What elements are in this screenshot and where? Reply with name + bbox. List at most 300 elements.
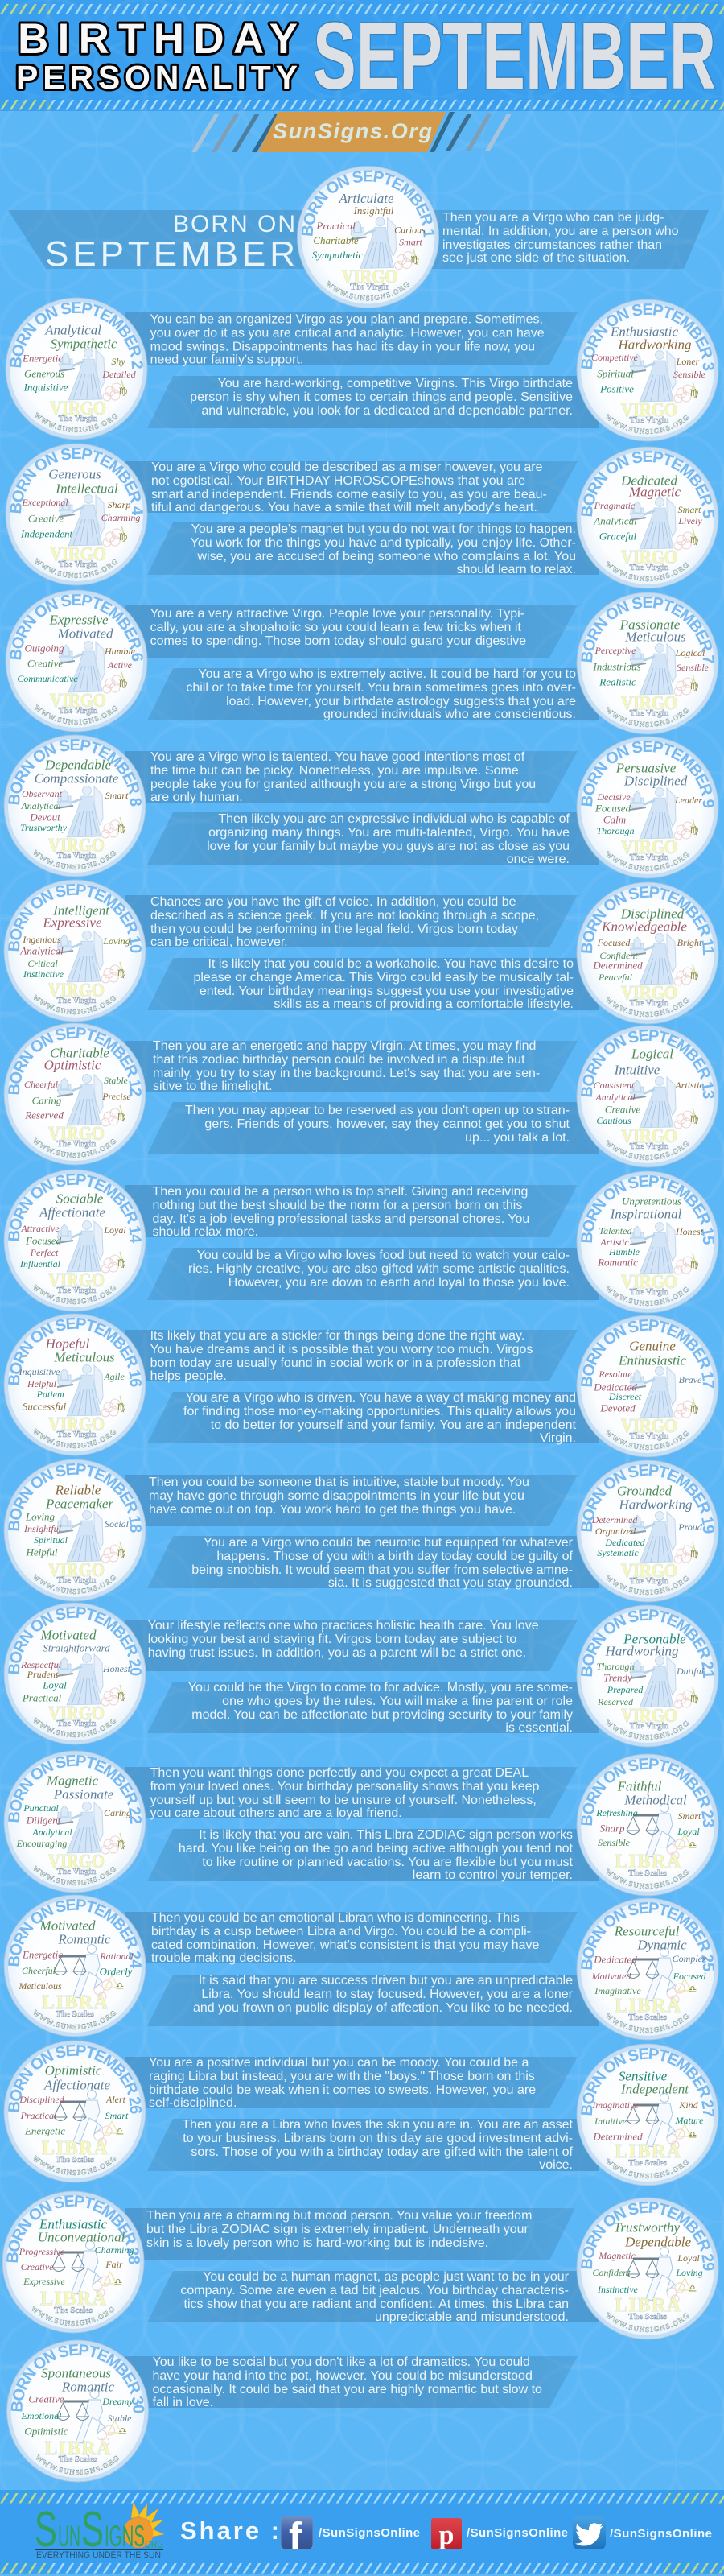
medallion: september 19: Hardworking <box>618 1497 692 1512</box>
medallion: september 16: The Virgin <box>57 1430 97 1439</box>
panel: september 18: may have gone through some disappointments in your life but you <box>149 1489 524 1503</box>
medallion: september 13: VIRGO <box>621 1126 677 1147</box>
medallion: september 10: ♍ <box>117 968 125 979</box>
medallion: september 14: ♍ <box>117 1257 125 1269</box>
medallion: september 10: Critical <box>27 958 58 969</box>
medallion: september 29: Confident <box>592 2267 631 2278</box>
row: september 18 and 19 <box>4 1459 718 1602</box>
medallion: september 1: Smart <box>399 237 423 248</box>
medallion: september 23: LIBRA <box>615 1852 681 1872</box>
medallion: september 7: VIRGO <box>621 693 677 714</box>
panel: september 7: load. However, your birthdate astrology suggests that you are <box>226 695 576 708</box>
panel: september 10: Chances are you have the gift of voice. In addition, you could be <box>150 895 516 909</box>
icon: facebook <box>281 2516 313 2558</box>
panel: september 5 <box>147 522 599 576</box>
medallion: september 25: Dedicated <box>593 1953 637 1966</box>
medallion: september 25: BORN ON SEPTEMBER 25 <box>578 1900 717 1972</box>
medallion: september 13: ♍ <box>690 1113 698 1125</box>
medallion: september 30: Dreamy <box>101 2396 134 2407</box>
medallion: september 10: BORN ON SEPTEMBER 10 <box>8 884 142 953</box>
medallion: september 30 <box>6 2340 148 2482</box>
medallion: september 15: WWW.SUNSIGNS.ORG <box>607 1286 689 1306</box>
medallion: september 25: Imaginative <box>594 1985 641 1996</box>
medallion: september 8: WWW.SUNSIGNS.ORG <box>34 849 116 869</box>
panel: september 14: should relax more. <box>153 1225 258 1239</box>
medallion: september 16: Successful <box>23 1401 66 1412</box>
medallion: september 26: The Scales <box>56 2156 94 2165</box>
medallion: september 3: ♍ <box>690 387 698 398</box>
medallion: september 20: VIRGO <box>48 1703 105 1724</box>
medallion: september 12: Caring <box>32 1095 62 1106</box>
medallion: september 3: Sensible <box>673 369 706 380</box>
panel: september 23: learn to control your temper. <box>413 1868 573 1882</box>
medallion: september 14: Affectionate <box>39 1204 106 1220</box>
medallion: september 9 <box>577 737 718 878</box>
medallion: september 3 <box>577 299 718 441</box>
medallion: september 25 <box>577 1898 718 2040</box>
medallion: september 1: Charitable <box>313 234 359 246</box>
medallion: september 6: Communicative <box>17 673 78 684</box>
medallion: september 21: Dutiful <box>676 1666 705 1677</box>
medallion: september 4: Creative <box>28 512 64 525</box>
medallion: september 27: Intuitive <box>594 2116 627 2127</box>
medallion: september 5: Pragmatic <box>594 500 636 511</box>
medallion: september 28: The Scales <box>54 2306 93 2315</box>
medallion: september 16: BORN ON SEPTEMBER 16 <box>8 1317 142 1387</box>
medallion: september 20: WWW.SUNSIGNS.ORG <box>31 1716 118 1739</box>
panel: september 18 <box>125 1475 578 1526</box>
medallion: september 16: Meticulous <box>53 1349 115 1365</box>
medallion: september 23: The Scales <box>628 1869 667 1878</box>
panel: september 19: being snobbish. It would seem that you suffer from selective amne- <box>191 1563 573 1577</box>
medallion: september 8: Analytical <box>20 800 61 811</box>
medallion: september 20: Prudent <box>27 1669 59 1680</box>
text: september 1 <box>442 211 679 265</box>
panel: september 16: born today are usually found in social work or in a profession that <box>150 1356 521 1370</box>
medallion: september 19: VIRGO <box>621 1561 677 1582</box>
row: september 22 and 23 <box>4 1751 718 1896</box>
medallion: september 25: Focused <box>673 1971 706 1982</box>
medallion: september 25: ♎ <box>689 1984 697 1995</box>
medallion: september 7: WWW.SUNSIGNS.ORG <box>607 707 689 728</box>
medallion: september 20: BORN ON SEPTEMBER 20 <box>8 1607 142 1676</box>
panel: september 17 <box>147 1391 599 1445</box>
medallion: september 14: WWW.SUNSIGNS.ORG <box>34 1284 116 1304</box>
text: september 1: see just one side of the situation. <box>442 251 630 265</box>
panel: september 28 <box>125 2208 575 2260</box>
panel: september 22: you care about others and are a loyal friend. <box>150 1806 402 1820</box>
panel: september 22: Then you want things done perfectly and you expect a great DEAL <box>150 1766 529 1780</box>
medallion: september 8: ♍ <box>117 823 125 834</box>
medallion: september 4: WWW.SUNSIGNS.ORG <box>35 558 117 578</box>
panel: september 23 <box>147 1828 599 1882</box>
medallion: september 28: ♎ <box>114 2277 122 2288</box>
medallion: september 29: Magnetic <box>598 2250 636 2261</box>
medallion: september 29: Trustworthy <box>614 2220 681 2235</box>
medallion: september 30: Stable <box>108 2413 132 2424</box>
panel: september 3 <box>147 376 599 428</box>
medallion: september 7: Sensible <box>677 662 710 673</box>
medallion: september 13 <box>577 1026 718 1167</box>
panel: september 4: tiful and dangerous. You have a smile that will melt anybody's heart. <box>151 501 537 514</box>
medallion: september 17: ♍ <box>690 1403 698 1414</box>
medallion: september 2: Analytical <box>44 322 101 338</box>
medallion: september 28: BORN ON SEPTEMBER 28 <box>4 2193 142 2265</box>
medallion: september 19 <box>577 1460 718 1602</box>
medallion: september 23 <box>577 1754 718 1896</box>
panel: september 27: sors. Those of you with a birthday today are gifted with the talent of <box>191 2145 574 2159</box>
panel: september 26: raging Libra but instead, you are with the "boys." Those born on this <box>149 2070 535 2083</box>
medallion: september 11: Determined <box>592 960 643 971</box>
panel: september 26 <box>125 2056 578 2110</box>
medallion: september 8: BORN ON SEPTEMBER 8 <box>8 739 142 807</box>
medallion: september 17: BORN ON SEPTEMBER 17 <box>581 1319 714 1388</box>
medallion: september 1: VIRGO <box>341 267 397 288</box>
medallion: september 21: VIRGO <box>621 1706 677 1727</box>
medallion: september 10: Expressive <box>42 914 102 931</box>
medallion: september 9: ♍ <box>690 824 698 836</box>
panel: september 22: from your loved ones. Your birthday personality shows that you keep <box>150 1780 540 1794</box>
panel: september 11: ented. Your birthday meanings suggest you use your investigative <box>200 985 574 998</box>
medallion: september 17: Genuine <box>629 1338 676 1354</box>
panel: september 20 <box>125 1619 578 1671</box>
medallion: september 4: Independent <box>20 528 73 539</box>
footer band <box>0 2490 724 2574</box>
panel: september 30: You like to be social but you don't like a lot of dramatics. You could <box>153 2355 530 2369</box>
panel: september 16: You have dreams and it is possible that you worry too much. Virgos <box>150 1343 533 1356</box>
medallion: september 21: BORN ON SEPTEMBER 21 <box>578 1607 717 1679</box>
medallion: september 21: Prepared <box>607 1684 644 1695</box>
panel: september 14: Then you could be a person who is top shelf. Giving and receiving <box>153 1185 528 1199</box>
medallion: september 9: Leader <box>674 795 702 806</box>
medallion: september 26: Practical <box>20 2110 57 2121</box>
medallion: september 27: Mature <box>675 2115 704 2126</box>
row: september 24 and 25 <box>4 1895 718 2040</box>
medallion: september 18: VIRGO <box>48 1560 105 1581</box>
medallion: september 19: The Virgin <box>630 1577 669 1586</box>
medallion: september 11: Knowledgeable <box>601 919 687 934</box>
panel: september 10: described as a science geek. If you are not looking through a scope, <box>150 909 539 923</box>
panel: september 8: You are a Virgo who is talented. You have good intentions most of <box>150 750 525 764</box>
panel: september 8: the time but can be picky. Nonetheless, you are impulsive. Some <box>150 764 519 778</box>
medallion: september 7 <box>577 592 718 734</box>
panel: september 27: voice. <box>539 2158 573 2172</box>
panel: september 3: You are hard-working, competitive Virgins. This Virgo birthdate <box>218 377 573 390</box>
panel: september 16 <box>125 1329 578 1383</box>
row: september 28 and 29 <box>2 2191 718 2339</box>
medallion: september 29: The Scales <box>628 2313 667 2322</box>
medallion: september 11: Focused <box>597 937 631 948</box>
panel: september 27: Then you are a Libra who loves the skin you are in. You are an asset <box>182 2118 574 2132</box>
medallion: september 3: Competitive <box>591 352 639 363</box>
medallion: september 20: Straightforward <box>43 1642 110 1653</box>
logo: sunsigns <box>35 2502 164 2561</box>
medallion: september 21 <box>577 1605 718 1747</box>
medallion: september 11: Confident <box>599 950 638 961</box>
medallion: september 26: ♎ <box>116 2126 124 2137</box>
intro heading: SEPTEMBER <box>45 234 295 274</box>
medallion: september 11: ♍ <box>690 970 698 981</box>
medallion: september 9: WWW.SUNSIGNS.ORG <box>607 851 689 871</box>
medallion: september 8: Trustworthy <box>20 822 68 833</box>
medallion: september 1: WWW.SUNSIGNS.ORG <box>327 280 409 301</box>
medallion: september 26: Smart <box>105 2110 129 2121</box>
medallion: september 18: Peacemaker <box>45 1496 113 1512</box>
panel: september 11: skills as a means of providing a comfortable lifestyle. <box>274 997 574 1011</box>
row: september 12 and 13 <box>4 1023 718 1167</box>
panel: september 10 <box>125 895 578 949</box>
handle: facebook: /SunSignsOnline <box>319 2526 420 2540</box>
medallion: september 7: ♍ <box>690 680 698 691</box>
panel: september 8: are only human. <box>150 791 243 804</box>
icon: twitter <box>573 2516 606 2549</box>
medallion: september 7: BORN ON SEPTEMBER 7 <box>581 597 714 663</box>
intro heading <box>45 211 295 274</box>
medallion: september 15: Romantic <box>597 1256 638 1269</box>
panel: september 2: you over do it as you are critical and analytic. However, you can have <box>150 327 545 341</box>
medallion: september 13: WWW.SUNSIGNS.ORG <box>607 1140 689 1161</box>
panel: september 13 <box>147 1102 599 1154</box>
panel: september 2: You can be an organized Virgo as you plan and prepare. Sometimes, <box>150 313 543 327</box>
medallion: september 24: The Scales <box>56 2010 94 2019</box>
medallion: september 2: WWW.SUNSIGNS.ORG <box>35 412 117 433</box>
medallion: september 11 <box>577 882 718 1024</box>
medallion: september 5: VIRGO <box>621 547 677 568</box>
medallion: september 22: Punctual <box>23 1802 59 1814</box>
panel: september 30: occasionally. It could be said that you are highly romantic but slow to <box>153 2383 542 2396</box>
medallion: september 12: BORN ON SEPTEMBER 12 <box>8 1027 142 1096</box>
medallion: september 30: Optimistic <box>24 2425 68 2438</box>
medallion: september 30: WWW.SUNSIGNS.ORG <box>34 2454 121 2476</box>
medallion: september 8: Devout <box>29 811 60 823</box>
medallion: september 5: WWW.SUNSIGNS.ORG <box>607 561 689 581</box>
medallion: september 17: WWW.SUNSIGNS.ORG <box>607 1430 689 1451</box>
logo: sunsigns: EVERYTHING UNDER THE SUN <box>36 2549 161 2561</box>
medallion: september 25: Dynamic <box>636 1937 687 1953</box>
panel: september 25: Libra. You should learn to stay focused. However, you are a loner <box>201 1988 574 2001</box>
medallion: september 20: Honest <box>102 1663 131 1674</box>
medallion: september 25: Complex <box>673 1953 707 1964</box>
panel: september 4: You are a Virgo who could be described as a miser however, you are <box>151 460 543 474</box>
medallion: september 7: Logical <box>675 647 705 658</box>
medallion: september 5: Analytical <box>593 515 637 526</box>
medallion: september 23: BORN ON SEPTEMBER 23 <box>578 1756 717 1828</box>
panel: september 29: company. Some are even a tad bit jealous. You birthday characteris- <box>180 2284 569 2297</box>
panel: september 9: once were. <box>507 852 570 866</box>
handle: twitter: /SunSignsOnline <box>610 2527 712 2541</box>
medallion: september 2: ♍ <box>119 386 127 397</box>
medallion: september 26: Disciplined <box>19 2094 65 2105</box>
medallion: september 27: Sensitive <box>619 2069 668 2083</box>
panel: september 12: sitive to the limelight. <box>153 1080 273 1093</box>
medallion: september 11: Bright <box>677 937 702 948</box>
medallion: september 29: Loving <box>675 2267 703 2278</box>
medallion: september 9: BORN ON SEPTEMBER 9 <box>581 741 714 808</box>
panel: september 29: You could be a human magnet, as people just want to be in your <box>203 2270 570 2284</box>
medallion: september 4: Charming <box>101 512 140 523</box>
panel: september 29 <box>147 2270 599 2324</box>
medallion: september 3: Enthusiastic <box>610 324 678 340</box>
medallion: september 10: Loving <box>102 935 130 947</box>
medallion: september 16: Agile <box>103 1371 125 1382</box>
medallion: september 18: Loving <box>25 1510 56 1523</box>
medallion: september 28: Fair <box>105 2259 123 2270</box>
medallion: september 3: VIRGO <box>621 400 677 421</box>
medallion: september 29 <box>577 2198 718 2339</box>
medallion: september 21: Hardworking <box>605 1644 679 1658</box>
panel: september 5: wise, you are accused of being someone who complains a lot. You <box>196 550 576 564</box>
panel: september 19: You are a Virgo who could be neurotic but equipped for whatever <box>204 1536 574 1550</box>
medallion: september 17: Discreet <box>608 1391 642 1402</box>
title: birthday personality <box>16 15 298 96</box>
medallion: september 6: Motivated <box>57 626 113 641</box>
panel: september 7: grounded individuals who are conscientious. <box>323 708 576 721</box>
medallion: september 20: Practical <box>22 1692 62 1703</box>
medallion: september 21: ♍ <box>690 1693 698 1704</box>
medallion: september 11: The Virgin <box>630 999 669 1008</box>
panel: september 26: birthdate could be weak when it comes to sweets. However, you are <box>149 2083 536 2097</box>
medallion: september 16: Patient <box>36 1389 65 1400</box>
medallion: september 12: Precise <box>101 1091 131 1102</box>
medallion: september 27: Imaginative <box>591 2099 639 2111</box>
title: birthday personality: PERSONALITY <box>16 59 298 96</box>
medallion: september 28 <box>2 2191 144 2333</box>
medallion: september 4 <box>6 444 147 585</box>
text: september 1: mental. In addition, you are a person who <box>442 225 679 238</box>
medallion: september 6: Creative <box>27 657 63 670</box>
medallion: september 2: Inquisitive <box>23 382 68 393</box>
medallion: september 2: VIRGO <box>50 398 106 419</box>
medallion: september 28: Charming <box>95 2244 134 2256</box>
medallion: september 19: Systematic <box>597 1547 639 1558</box>
medallion: september 11: BORN ON SEPTEMBER 11 <box>581 886 714 955</box>
medallion: september 1: The Virgin <box>350 283 389 291</box>
row: september 6 and 7 <box>6 590 718 734</box>
medallion: september 3: WWW.SUNSIGNS.ORG <box>607 414 689 435</box>
medallion: september 8: Observant <box>22 788 63 799</box>
medallion: september 22: The Virgin <box>57 1868 97 1876</box>
panel: september 30: have your hand into the pot, however. You could be misunderstood <box>153 2369 533 2383</box>
medallion: september 20: Respectful <box>20 1659 62 1670</box>
panel: september 30 <box>125 2355 578 2409</box>
medallion: september 5: BORN ON SEPTEMBER 5 <box>581 451 714 518</box>
medallion: september 18: ♍ <box>117 1547 125 1558</box>
medallion: september 14: Influential <box>19 1258 61 1269</box>
medallion: september 18: BORN ON SEPTEMBER 18 <box>8 1463 142 1533</box>
medallion: september 4: VIRGO <box>50 544 106 565</box>
medallion: september 24: Romantic <box>57 1932 111 1946</box>
medallion: september 14 <box>4 1170 146 1311</box>
medallion: september 12: Cheerful <box>24 1079 59 1090</box>
medallion: september 3: Hardworking <box>618 336 692 353</box>
row: september 16 and 17 <box>4 1314 718 1457</box>
panel: september 24: cated combination. However, what's consistent is that you may have <box>151 1938 540 1952</box>
medallion: september 14: VIRGO <box>48 1270 105 1291</box>
panel: september 12 <box>125 1039 578 1093</box>
medallion: september 15: Honest <box>675 1226 704 1237</box>
medallion: september 18: The Virgin <box>57 1576 97 1585</box>
panel: september 15: You could be a Virgo who loves food but need to watch your calo- <box>197 1249 570 1262</box>
panel: september 6: comes to spending. Those born today should guard your digestive <box>150 634 526 648</box>
panel: september 12: mainly, you try to stay in the background. Let's say that you are sen- <box>153 1067 540 1080</box>
medallion: september 15: Inspirational <box>610 1206 682 1222</box>
medallion: september 22: Analytical <box>31 1827 72 1838</box>
medallion: september 17: VIRGO <box>621 1416 677 1437</box>
medallion: september 6: The Virgin <box>59 707 98 716</box>
medallion: september 16: WWW.SUNSIGNS.ORG <box>34 1428 116 1449</box>
medallion: september 19: Proud <box>677 1521 703 1533</box>
medallion: september 20: Loyal <box>42 1679 67 1690</box>
medallion: september 30: Spontaneous <box>41 2365 111 2381</box>
panel: september 21: model. You can be affectionate but providing security to your family <box>191 1708 573 1722</box>
panel: september 6: You are a very attractive Virgo. People love your personality. Typi- <box>150 607 524 621</box>
medallion: september 20: Motivated <box>40 1628 97 1642</box>
medallion: september 15: BORN ON SEPTEMBER 15 <box>581 1175 714 1245</box>
medallion: september 23: WWW.SUNSIGNS.ORG <box>604 1868 691 1890</box>
panel: september 12: that this zodiac birthday person could be involved in a dispute but <box>153 1053 525 1067</box>
medallion: september 2: The Virgin <box>59 415 98 423</box>
panel: september 9 <box>147 812 599 866</box>
panel: september 25: It is said that you are success driven but you are an unpredictable <box>199 1974 573 1988</box>
medallion: september 6: WWW.SUNSIGNS.ORG <box>35 704 117 724</box>
medallion: september 13: Analytical <box>594 1092 636 1103</box>
medallion: september 4: Intellectual <box>55 481 118 496</box>
panel: september 5: You work for the things you have and typically, you enjoy life. Other- <box>191 536 576 550</box>
panel: september 13: Then you may appear to be reserved as you don't open up to stran- <box>185 1104 570 1117</box>
medallion: september 17: The Virgin <box>630 1432 669 1441</box>
medallion: september 2: Detailed <box>101 369 137 380</box>
medallion: september 22: Encouraging <box>16 1838 67 1849</box>
panel: september 6: cally, you are a shopaholic so you could learn a few tricks when it <box>150 621 521 634</box>
panel: september 9: Then likely you are an expressive individual who is capable of <box>218 812 570 826</box>
medallion: september 13: Intuitive <box>614 1063 660 1077</box>
medallion: september 15 <box>577 1171 718 1313</box>
medallion: september 19: ♍ <box>690 1548 698 1559</box>
medallion: september 17: Devoted <box>599 1402 636 1414</box>
medallion: september 15: VIRGO <box>621 1272 677 1293</box>
panel: september 23: to like routine or planned vacations. You are flexible but you must <box>202 1856 574 1869</box>
medallion: september 23: Methodical <box>623 1792 687 1808</box>
medallion: september 15: Humble <box>608 1246 640 1257</box>
medallion: september 18 <box>4 1459 146 1601</box>
medallion: september 12: ♍ <box>117 1111 125 1122</box>
panel: september 7: chill or to take time for yourself. You brain sometimes goes into over- <box>186 681 576 695</box>
medallion: september 21: WWW.SUNSIGNS.ORG <box>604 1719 691 1741</box>
medallion: september 27: ♎ <box>689 2129 697 2140</box>
panel: september 11 <box>147 957 599 1011</box>
panel: september 21: is essential. <box>505 1721 573 1735</box>
panel: september 4: smart and independent. Friends come easily to you, as you are beau- <box>151 488 547 502</box>
medallion: september 14: Attractive <box>20 1223 60 1234</box>
panel: september 26: self-disciplined. <box>149 2096 237 2110</box>
panel: september 17: Virgin. <box>540 1431 576 1445</box>
medallion: september 6: Outgoing <box>24 642 64 654</box>
medallion: september 9: Decisive <box>596 791 631 803</box>
title: birthday personality: BIRTHDAY <box>18 15 298 63</box>
medallion: september 25: WWW.SUNSIGNS.ORG <box>604 2012 691 2034</box>
logo: sunsigns: ORG <box>145 2538 163 2550</box>
medallion: september 3: BORN ON SEPTEMBER 3 <box>581 303 714 370</box>
medallion: september 18: WWW.SUNSIGNS.ORG <box>34 1574 116 1594</box>
medallion: september 30: Emotional <box>21 2410 62 2421</box>
panel: september 15: However, you are down to earth and loyal to those you love. <box>228 1276 570 1290</box>
medallion: september 7: Industrious <box>592 660 641 673</box>
medallion: september 9: VIRGO <box>621 837 677 858</box>
medallion: september 22: Diligent <box>26 1814 61 1826</box>
medallion: september 10: WWW.SUNSIGNS.ORG <box>34 994 116 1014</box>
medallion: september 14: Sociable <box>56 1191 104 1206</box>
medallion: september 22: WWW.SUNSIGNS.ORG <box>31 1864 118 1887</box>
